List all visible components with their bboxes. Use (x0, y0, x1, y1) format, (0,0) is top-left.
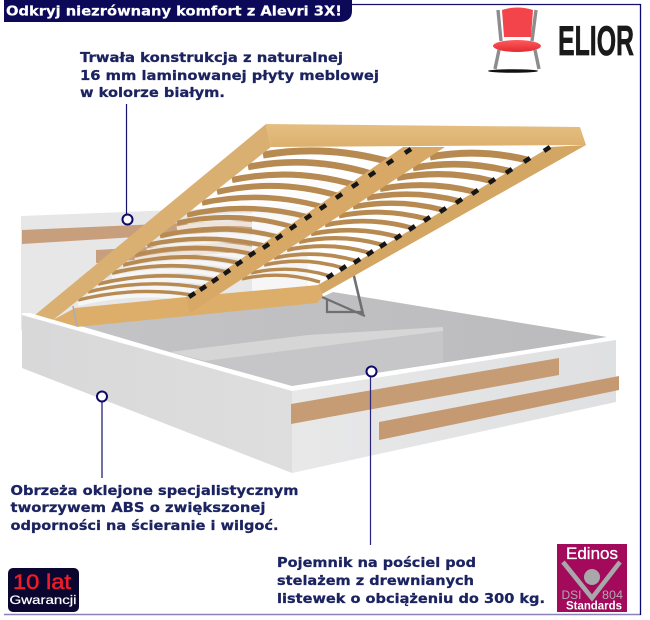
foot panel lower wood strip (379, 376, 619, 440)
text block: storage: listewek o obciążeniu do 300 kg. (277, 592, 545, 607)
foot panel upper wood strip (291, 358, 559, 424)
badge: Edinos DSI 804 Standards: Standards (566, 600, 622, 612)
text block: construction: w kolorze białym. (80, 86, 225, 101)
lid frame (35, 124, 586, 327)
bed illustration (21, 124, 619, 473)
text block: storage: Pojemnik na pościel pod (277, 556, 476, 571)
slats right section (242, 153, 527, 282)
storage divider (170, 327, 443, 387)
side panel (22, 315, 292, 473)
text block: storage: stelażem z drewnianych (277, 574, 474, 589)
badge: 10 year warranty: Gwarancji (10, 595, 76, 607)
text block: ABS edges (10, 484, 298, 534)
lid support strut (73, 306, 77, 327)
text block: construction: Trwała konstrukcja z naturalnej (80, 51, 343, 66)
panel top edges (22, 313, 616, 391)
badge: Edinos DSI 804 Standards: Edinos (566, 545, 618, 563)
badge: 10 year warranty (8, 568, 79, 612)
callout marker: headboard (122, 104, 132, 224)
headboard (21, 207, 308, 330)
badge: Edinos DSI 804 Standards: 804 (602, 588, 623, 602)
lift mechanism (322, 272, 365, 316)
slat gaps left section (78, 182, 355, 304)
text block: ABS edges: odporności na ścieranie i wilgoć. (10, 519, 278, 534)
callout marker: edge banding (97, 392, 107, 478)
title banner: Odkryj niezrównany komfort z Alevri 3X! (6, 4, 342, 20)
text block: construction: 16 mm laminowanej płyty meblowej (80, 69, 379, 84)
lid slat fasteners (189, 147, 550, 297)
badge: Edinos DSI 804 Standards (557, 544, 627, 612)
callout marker: storage (366, 366, 376, 545)
text block: construction (80, 51, 379, 101)
title banner (4, 0, 352, 22)
text block: ABS edges: Obrzeża oklejone specjalistycznym (10, 484, 298, 499)
text block: ABS edges: tworzywem ABS o zwiększonej (10, 501, 266, 516)
logo: Elior chair (488, 8, 634, 73)
badge: 10 year warranty: 10 lat (13, 571, 71, 594)
text block: storage (277, 556, 545, 607)
slats left section (78, 151, 390, 300)
foot panel (292, 338, 616, 473)
storage box interior (60, 292, 607, 388)
badge: Edinos DSI 804 Standards: DSI (562, 588, 582, 602)
